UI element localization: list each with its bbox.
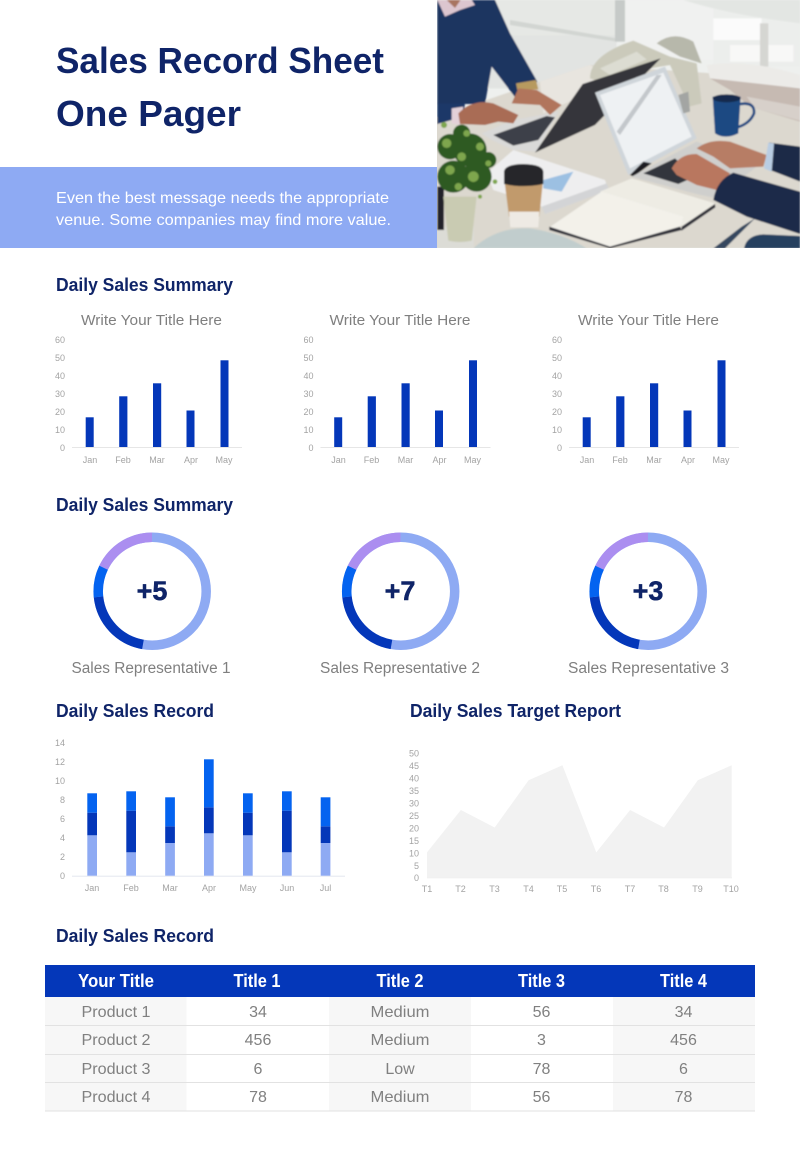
stacked bar chart: Jul — [320, 883, 331, 893]
donut: sales representative 3 — [568, 537, 729, 677]
bar chart 3: 20 — [552, 407, 562, 417]
bar chart 1: 50 — [55, 353, 65, 363]
donut: sales representative 2: Sales Representative 2 — [320, 660, 480, 677]
bar chart 1: May — [215, 455, 233, 465]
photo: business people working on laptops at a desk — [430, 0, 800, 248]
stacked bar chart: 8 — [60, 795, 65, 805]
donut: sales representative 3: Sales Representative 3 — [568, 660, 729, 677]
bar chart 2: 40 — [303, 371, 314, 381]
subtitle band: Even the best message needs the appropriate — [56, 190, 389, 207]
heading: daily sales record (stacked chart): Daily Sales Record — [56, 701, 214, 721]
bar chart 2: 30 — [303, 389, 314, 399]
bar chart 1: 40 — [55, 371, 65, 381]
area chart: T9 — [692, 884, 703, 894]
table: Title 4 — [660, 971, 707, 991]
donut: sales representative 3: +3 — [633, 576, 663, 606]
subtitle band: venue. Some companies may find more value. — [56, 212, 391, 229]
heading: daily sales record (table): Daily Sales Record — [56, 926, 214, 946]
stacked bar chart: 6 — [60, 814, 65, 824]
table: Medium — [370, 1032, 430, 1049]
bar chart 2: Write Your Title Here — [330, 312, 470, 329]
bar chart 1: Write Your Title Here — [81, 312, 222, 329]
stacked bar chart: Feb — [123, 883, 139, 893]
donut: sales representative 1: Sales Representative 1 — [72, 660, 230, 677]
area chart: T8 — [658, 884, 669, 894]
area chart: T1 — [422, 884, 432, 894]
table: 6 — [254, 1061, 263, 1078]
table: Title 2 — [376, 971, 424, 991]
bar chart 2 — [303, 312, 490, 465]
heading: daily sales target report: Daily Sales Target Report — [410, 701, 621, 721]
bar chart 1: 20 — [55, 407, 65, 417]
area chart: 40 — [409, 774, 419, 784]
table: Your Title — [78, 971, 154, 991]
area chart: 30 — [409, 798, 419, 808]
table: Product 4 — [82, 1089, 151, 1106]
bar chart 1: Mar — [149, 455, 165, 465]
area chart: T10 — [723, 884, 739, 894]
stacked bar chart: Jan — [85, 883, 99, 893]
table: Medium — [370, 1004, 430, 1021]
stacked bar chart: 2 — [60, 852, 65, 862]
table: 34 — [675, 1004, 692, 1021]
table: 6 — [679, 1061, 688, 1078]
bar chart 3 — [552, 312, 739, 465]
bar chart 3: Apr — [681, 455, 695, 465]
stacked bar chart: May — [239, 883, 257, 893]
title — [56, 40, 384, 134]
donut: sales representative 2: +7 — [385, 576, 415, 606]
area chart: 5 — [414, 861, 419, 871]
title: One Pager — [56, 93, 241, 134]
bar chart 2: May — [464, 455, 481, 465]
area chart: 45 — [409, 761, 419, 771]
heading: daily sales summary (bar charts): Daily Sales Summary — [56, 275, 233, 295]
table: Title 3 — [518, 971, 565, 991]
bar chart 3: 60 — [552, 335, 562, 345]
table: 78 — [249, 1089, 267, 1106]
table: Title 1 — [234, 971, 280, 991]
bar chart 3: 10 — [552, 425, 562, 435]
area chart: T5 — [557, 884, 567, 894]
bar chart 2: Mar — [398, 455, 413, 465]
bar chart 3: 50 — [552, 353, 562, 363]
donut: sales representative 1: +5 — [137, 576, 167, 606]
table: Product 2 — [82, 1032, 151, 1049]
bar chart 2: Feb — [364, 455, 379, 465]
stacked bar chart: 10 — [55, 776, 65, 786]
stacked bar chart: Mar — [162, 883, 178, 893]
bar chart 1: 0 — [60, 443, 65, 453]
bar chart 2: 50 — [303, 353, 314, 363]
stacked bar chart: 0 — [60, 871, 65, 881]
stacked bar chart: 4 — [60, 833, 65, 843]
area chart: 50 — [409, 748, 419, 758]
bar chart 3: 40 — [552, 371, 562, 381]
table: Low — [385, 1061, 415, 1078]
area chart: 0 — [414, 873, 419, 883]
bar chart 1: 30 — [55, 389, 65, 399]
table: Product 1 — [82, 1004, 151, 1021]
bar chart 3: Feb — [612, 455, 628, 465]
area chart: 25 — [409, 811, 419, 821]
table: Medium — [370, 1089, 430, 1106]
bar chart 3: Jan — [580, 455, 594, 465]
stacked bar chart: 12 — [55, 757, 65, 767]
table: 456 — [245, 1032, 271, 1049]
bar chart 1: 10 — [55, 425, 65, 435]
stacked bar chart: Apr — [202, 883, 216, 893]
bar chart 3: May — [712, 455, 730, 465]
bar chart 1: Feb — [115, 455, 131, 465]
table: 3 — [537, 1032, 546, 1049]
area chart: T3 — [489, 884, 500, 894]
table: 56 — [533, 1089, 550, 1106]
stacked bar chart: Jun — [280, 883, 294, 893]
bar chart 2: 0 — [308, 443, 314, 453]
bar chart 2: Jan — [331, 455, 346, 465]
bar chart 2: 60 — [303, 335, 314, 345]
area chart: T7 — [625, 884, 635, 894]
bar chart 3: 0 — [557, 443, 562, 453]
stacked bar chart — [55, 738, 345, 893]
area chart: T2 — [455, 884, 466, 894]
bar chart 1 — [55, 312, 242, 465]
title: Sales Record Sheet — [56, 40, 384, 81]
area chart: T4 — [523, 884, 534, 894]
bar chart 3: Mar — [646, 455, 662, 465]
bar chart 2: 20 — [303, 407, 314, 417]
bar chart 1: Apr — [184, 455, 198, 465]
heading: daily sales summary (donuts): Daily Sales Summary — [56, 495, 233, 515]
area chart: 20 — [409, 824, 419, 834]
table: Product 3 — [82, 1061, 151, 1078]
bar chart 3: 30 — [552, 389, 562, 399]
area chart: 10 — [409, 848, 419, 858]
table: 56 — [533, 1004, 550, 1021]
donut: sales representative 1 — [72, 537, 230, 677]
table: 78 — [675, 1089, 692, 1106]
bar chart 1: 60 — [55, 335, 65, 345]
area chart: T6 — [591, 884, 601, 894]
area chart: 15 — [409, 836, 419, 846]
table: 34 — [249, 1004, 267, 1021]
table: 78 — [533, 1061, 550, 1078]
area chart — [409, 748, 739, 894]
bar chart 1: Jan — [83, 455, 97, 465]
bar chart 3: Write Your Title Here — [578, 312, 719, 329]
subtitle band — [0, 167, 437, 248]
bar chart 2: Apr — [432, 455, 447, 465]
table — [45, 965, 755, 1112]
stacked bar chart: 14 — [55, 738, 65, 748]
donut: sales representative 2 — [320, 537, 480, 677]
bar chart 2: 10 — [303, 425, 314, 435]
table: 456 — [670, 1032, 697, 1049]
area chart: 35 — [409, 786, 419, 796]
